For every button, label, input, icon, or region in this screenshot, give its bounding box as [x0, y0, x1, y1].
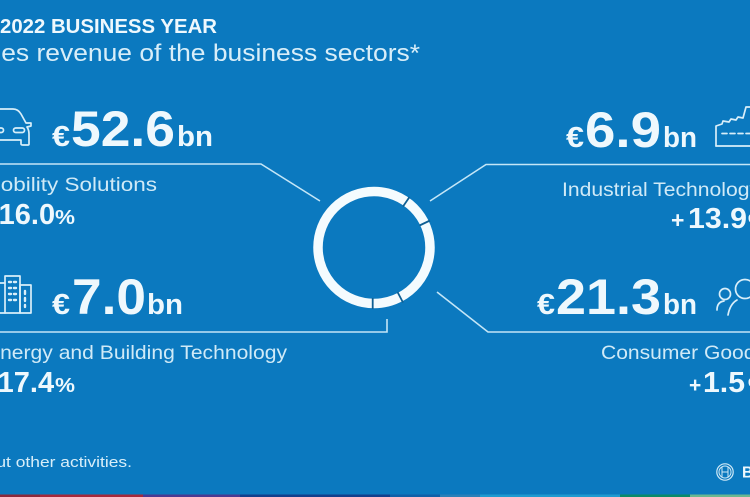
value: 7.0 bn: €: [52, 289, 70, 321]
connector line: [437, 292, 750, 332]
value: 6.9 bn: €: [566, 122, 584, 154]
panel: consumer goods: [437, 269, 750, 399]
value: 52.6 bn: [52, 101, 213, 157]
change percent: %: [55, 375, 75, 397]
value: 21.3 bn: [537, 269, 697, 325]
connector line: [0, 164, 320, 201]
value: 7.0 bn: 7.0: [72, 269, 146, 325]
chart: donut ring: [318, 192, 430, 309]
value: 52.6 bn: bn: [177, 121, 213, 153]
value: 7.0 bn: [52, 269, 183, 325]
panel: energy and building technology: [0, 269, 387, 399]
value: 21.3 bn: 21.3: [556, 269, 661, 325]
value: 52.6 bn: €: [52, 121, 70, 153]
value: 7.0 bn: bn: [147, 289, 183, 321]
value: 21.3 bn: bn: [663, 289, 697, 321]
value: 6.9 bn: [566, 102, 697, 158]
icon: car: [0, 109, 31, 145]
connector line: [430, 164, 750, 201]
change percent: [689, 367, 750, 399]
change percent: 1.5: [703, 367, 745, 399]
change percent: 13.9: [688, 203, 747, 235]
value: 6.9 bn: bn: [663, 122, 697, 154]
panel: mobility solutions: [0, 101, 320, 231]
change percent: +: [671, 207, 684, 233]
value: 52.6 bn: 52.6: [71, 101, 175, 157]
icon: people: [717, 280, 750, 315]
change percent: +: [689, 374, 701, 397]
change percent: %: [55, 207, 75, 229]
sector name: Industrial Technology: [562, 179, 750, 201]
icon: factory: [716, 107, 750, 146]
connector line: [0, 319, 387, 332]
icon: buildings: [0, 276, 31, 313]
title: 2022 BUSINESS YEAR: [0, 16, 218, 38]
value: 21.3 bn: €: [537, 289, 555, 321]
value: 6.9 bn: 6.9: [585, 102, 661, 158]
panel: industrial technology: [430, 102, 750, 235]
sector name: Consumer Goods: [601, 342, 750, 364]
bottom colour strip: [0, 494, 750, 497]
logo: Bosch: [717, 464, 750, 482]
